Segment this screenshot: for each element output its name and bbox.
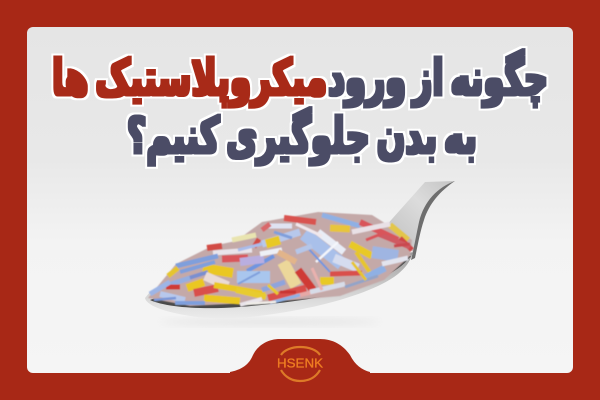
logo: HSENK — [277, 347, 324, 381]
illustration: spoon of microplastics — [145, 181, 455, 325]
logo ring — [281, 347, 320, 381]
plastic shards — [148, 212, 412, 306]
logo text: HSENK — [277, 356, 324, 370]
title — [52, 49, 548, 166]
title: میکروپلاستیک ها — [52, 49, 327, 108]
footer logo tab — [230, 339, 370, 373]
spoon shadow — [160, 319, 380, 325]
spoon handle — [384, 181, 455, 252]
spoon bowl — [145, 252, 413, 318]
panel: main card — [27, 27, 573, 373]
spoon rim — [150, 256, 411, 308]
